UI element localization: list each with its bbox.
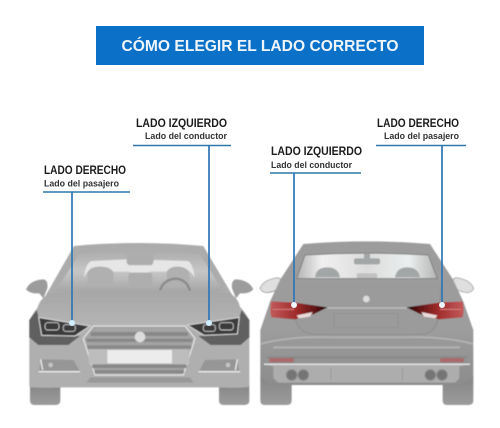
front wheels <box>30 383 249 405</box>
grille <box>83 326 195 375</box>
callout: rear left side of image, lado izquierdo <box>270 146 362 308</box>
callout: rear right side of image, lado derecho: LADO DERECHO <box>377 118 459 130</box>
rear mirrors <box>260 278 474 293</box>
callout: front right side of image, lado izquierdo: LADO IZQUIERDO <box>136 118 227 130</box>
rear body <box>260 241 473 385</box>
right fog lamp <box>199 359 240 372</box>
exhaust pipes <box>286 370 447 380</box>
windshield interior <box>84 253 195 291</box>
dark fenders <box>29 310 249 345</box>
left fog lamp <box>39 359 80 372</box>
front windshield <box>55 251 223 292</box>
callout: front right side of image, lado izquierdo <box>133 118 231 326</box>
right headlight <box>187 317 239 335</box>
front car illustration <box>26 243 253 405</box>
front roof and pillars <box>45 243 233 297</box>
title banner: CÓMO ELEGIR EL LADO CORRECTO <box>122 37 398 55</box>
left headlight <box>39 317 90 336</box>
trunk outline <box>293 282 442 334</box>
front lower body <box>29 305 249 388</box>
front badge <box>135 332 145 342</box>
number plate <box>107 350 172 363</box>
rear badge <box>363 296 370 302</box>
headlight details <box>45 323 233 331</box>
rear diffuser <box>263 363 470 383</box>
callout: rear left side of image, lado izquierdo: Lado del conductor <box>271 160 352 171</box>
left taillight <box>270 301 327 319</box>
callout: rear right side of image, lado derecho <box>376 118 466 308</box>
title banner <box>96 26 424 65</box>
callout: rear right side of image, lado derecho: Lado del pasajero <box>384 131 459 142</box>
bumper highlights <box>260 337 473 357</box>
callout: front left side of image, lado derecho: Lado del pasajero <box>44 178 119 190</box>
callout: front left side of image, lado derecho <box>43 165 130 326</box>
callout: front left side of image, lado derecho: LADO DERECHO <box>44 165 126 177</box>
rear reflectors <box>269 358 464 362</box>
hood <box>37 290 241 325</box>
rear window details <box>315 253 420 278</box>
front mirrors <box>26 279 253 298</box>
callout: front right side of image, lado izquierdo: Lado del conductor <box>145 131 227 142</box>
lower intake <box>87 377 193 383</box>
rear wheels <box>260 377 473 405</box>
callout: rear left side of image, lado izquierdo: LADO IZQUIERDO <box>271 146 362 158</box>
rear car illustration <box>260 241 474 405</box>
right taillight <box>407 301 464 319</box>
rear window <box>297 253 437 279</box>
